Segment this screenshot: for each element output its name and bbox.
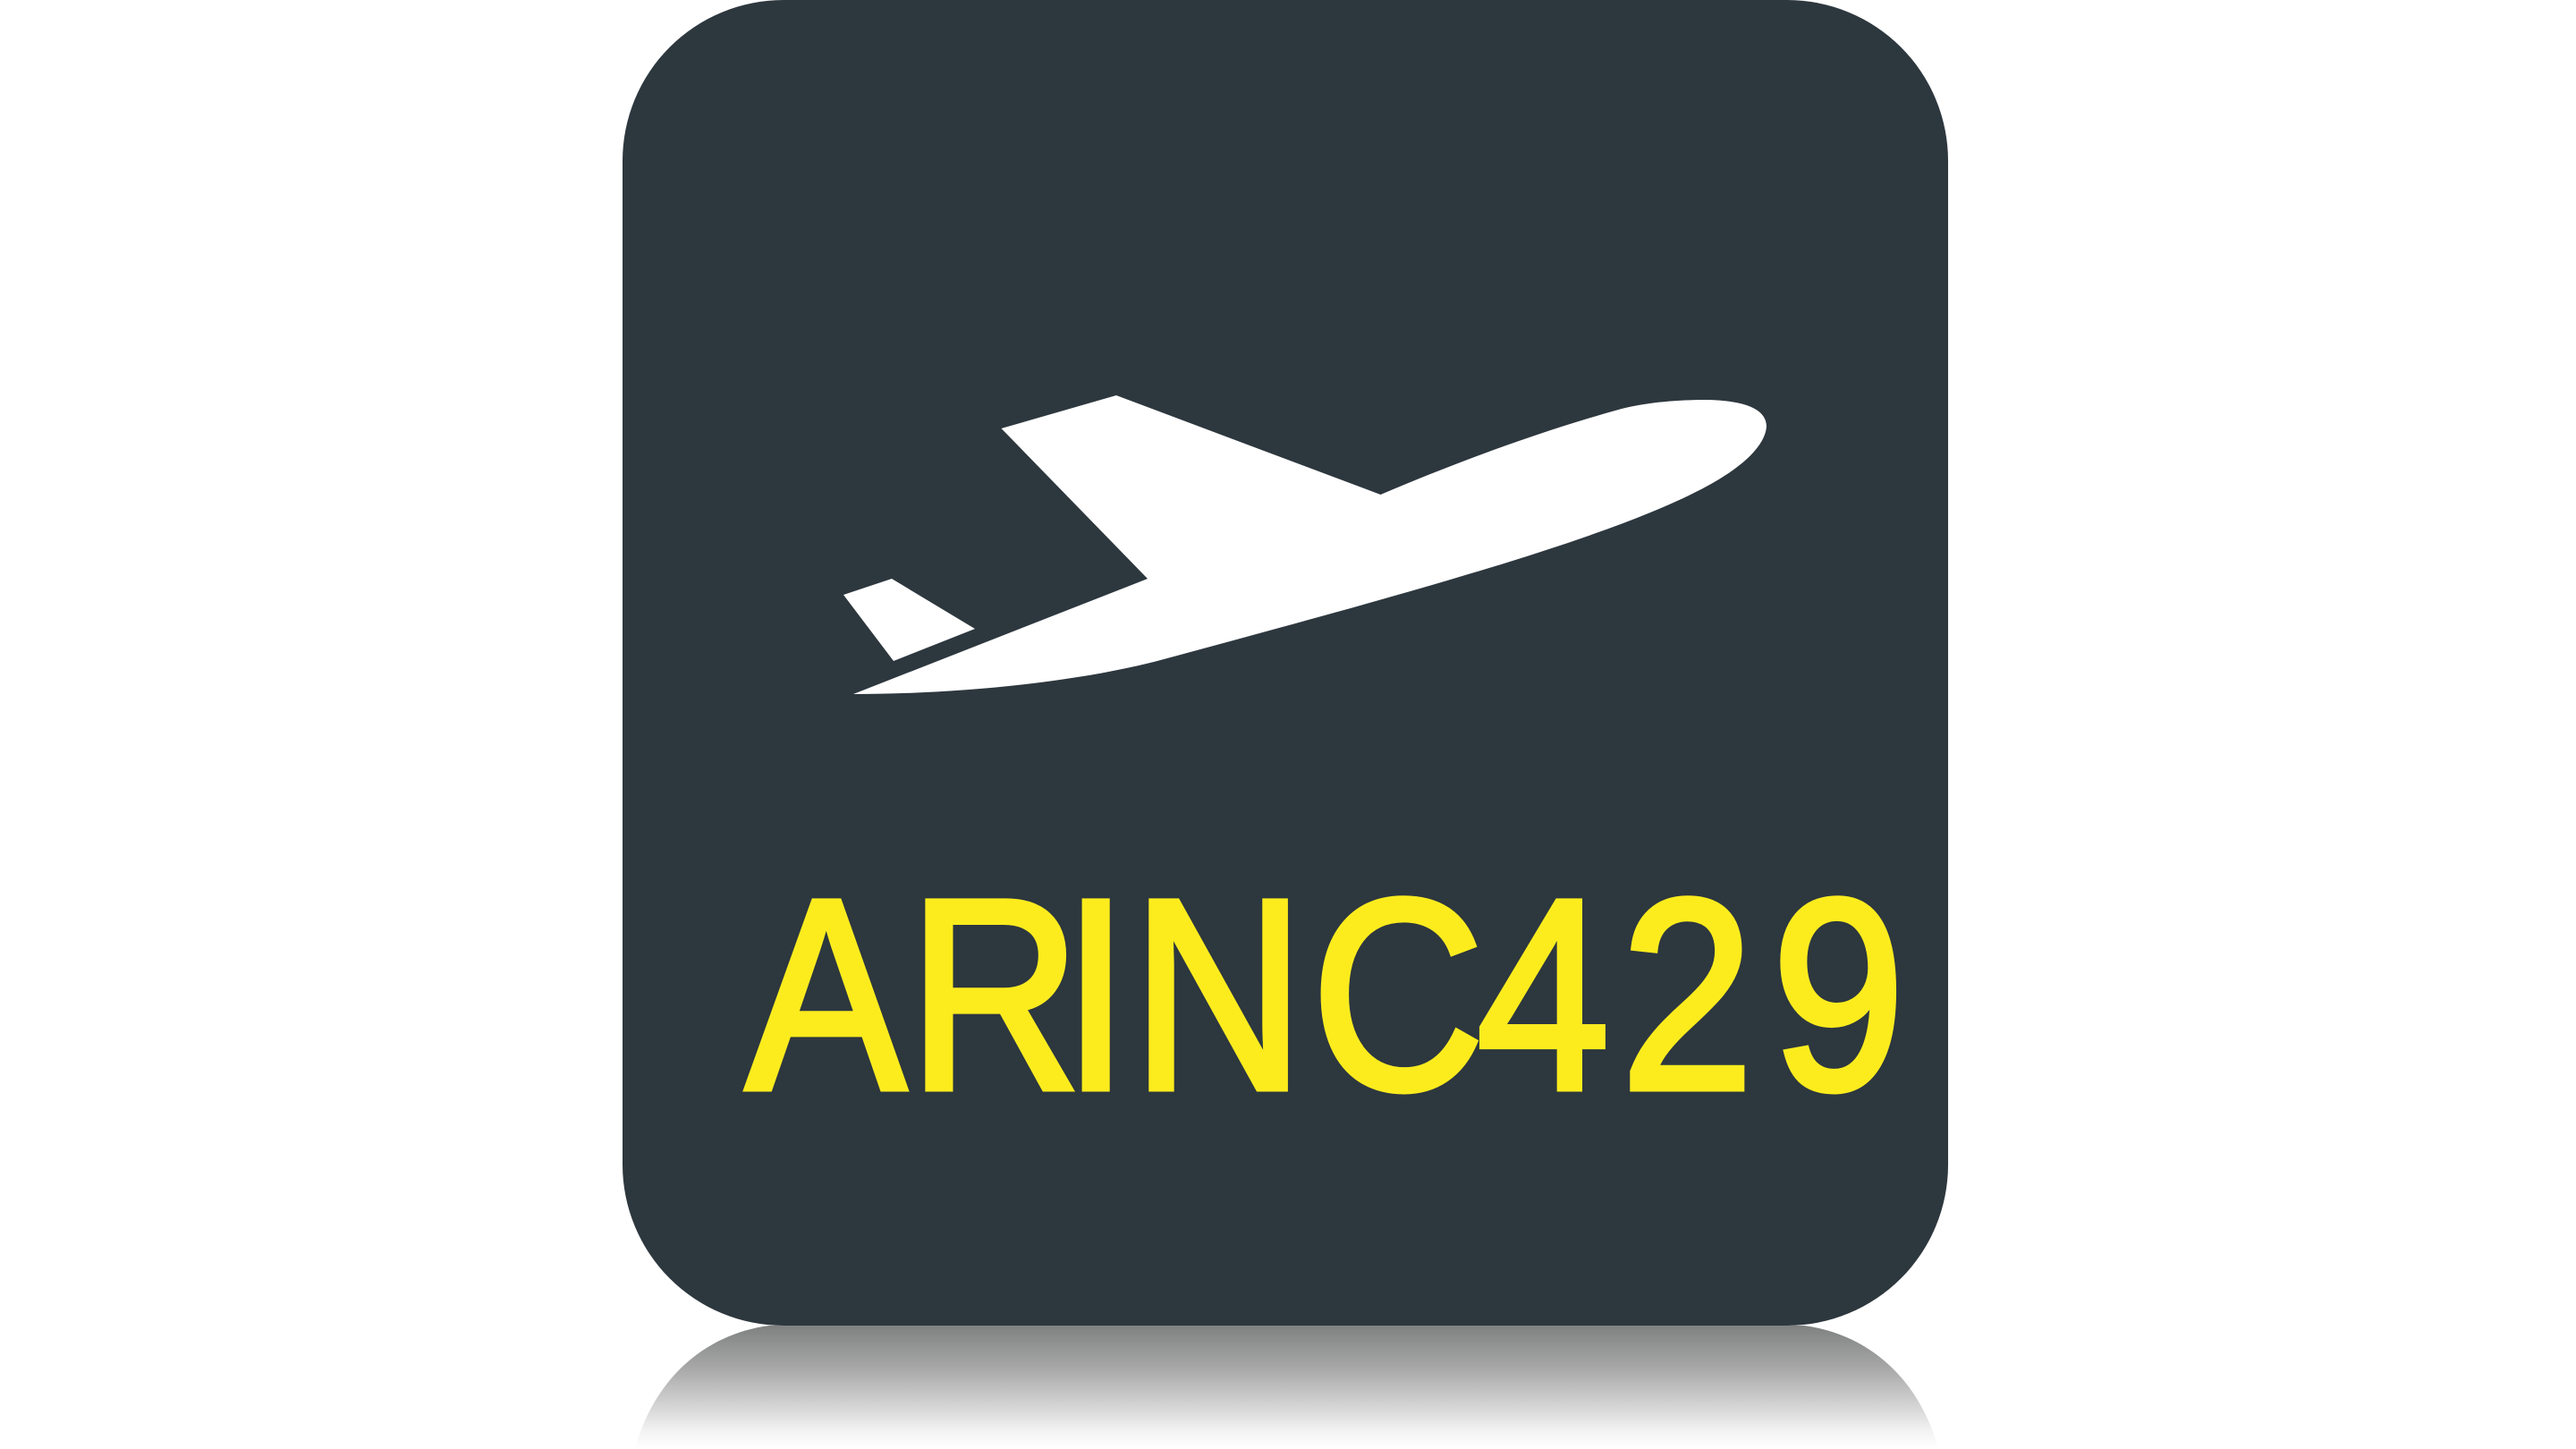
airplane tail fin — [843, 579, 975, 661]
reflection below badge — [635, 1326, 1938, 1449]
title: ARINC429: ARINC429 — [746, 843, 1905, 1147]
icon: airplane taking off — [843, 395, 1767, 694]
panel: rounded dark badge — [623, 0, 1948, 1326]
airplane fuselage and wing — [853, 395, 1767, 694]
